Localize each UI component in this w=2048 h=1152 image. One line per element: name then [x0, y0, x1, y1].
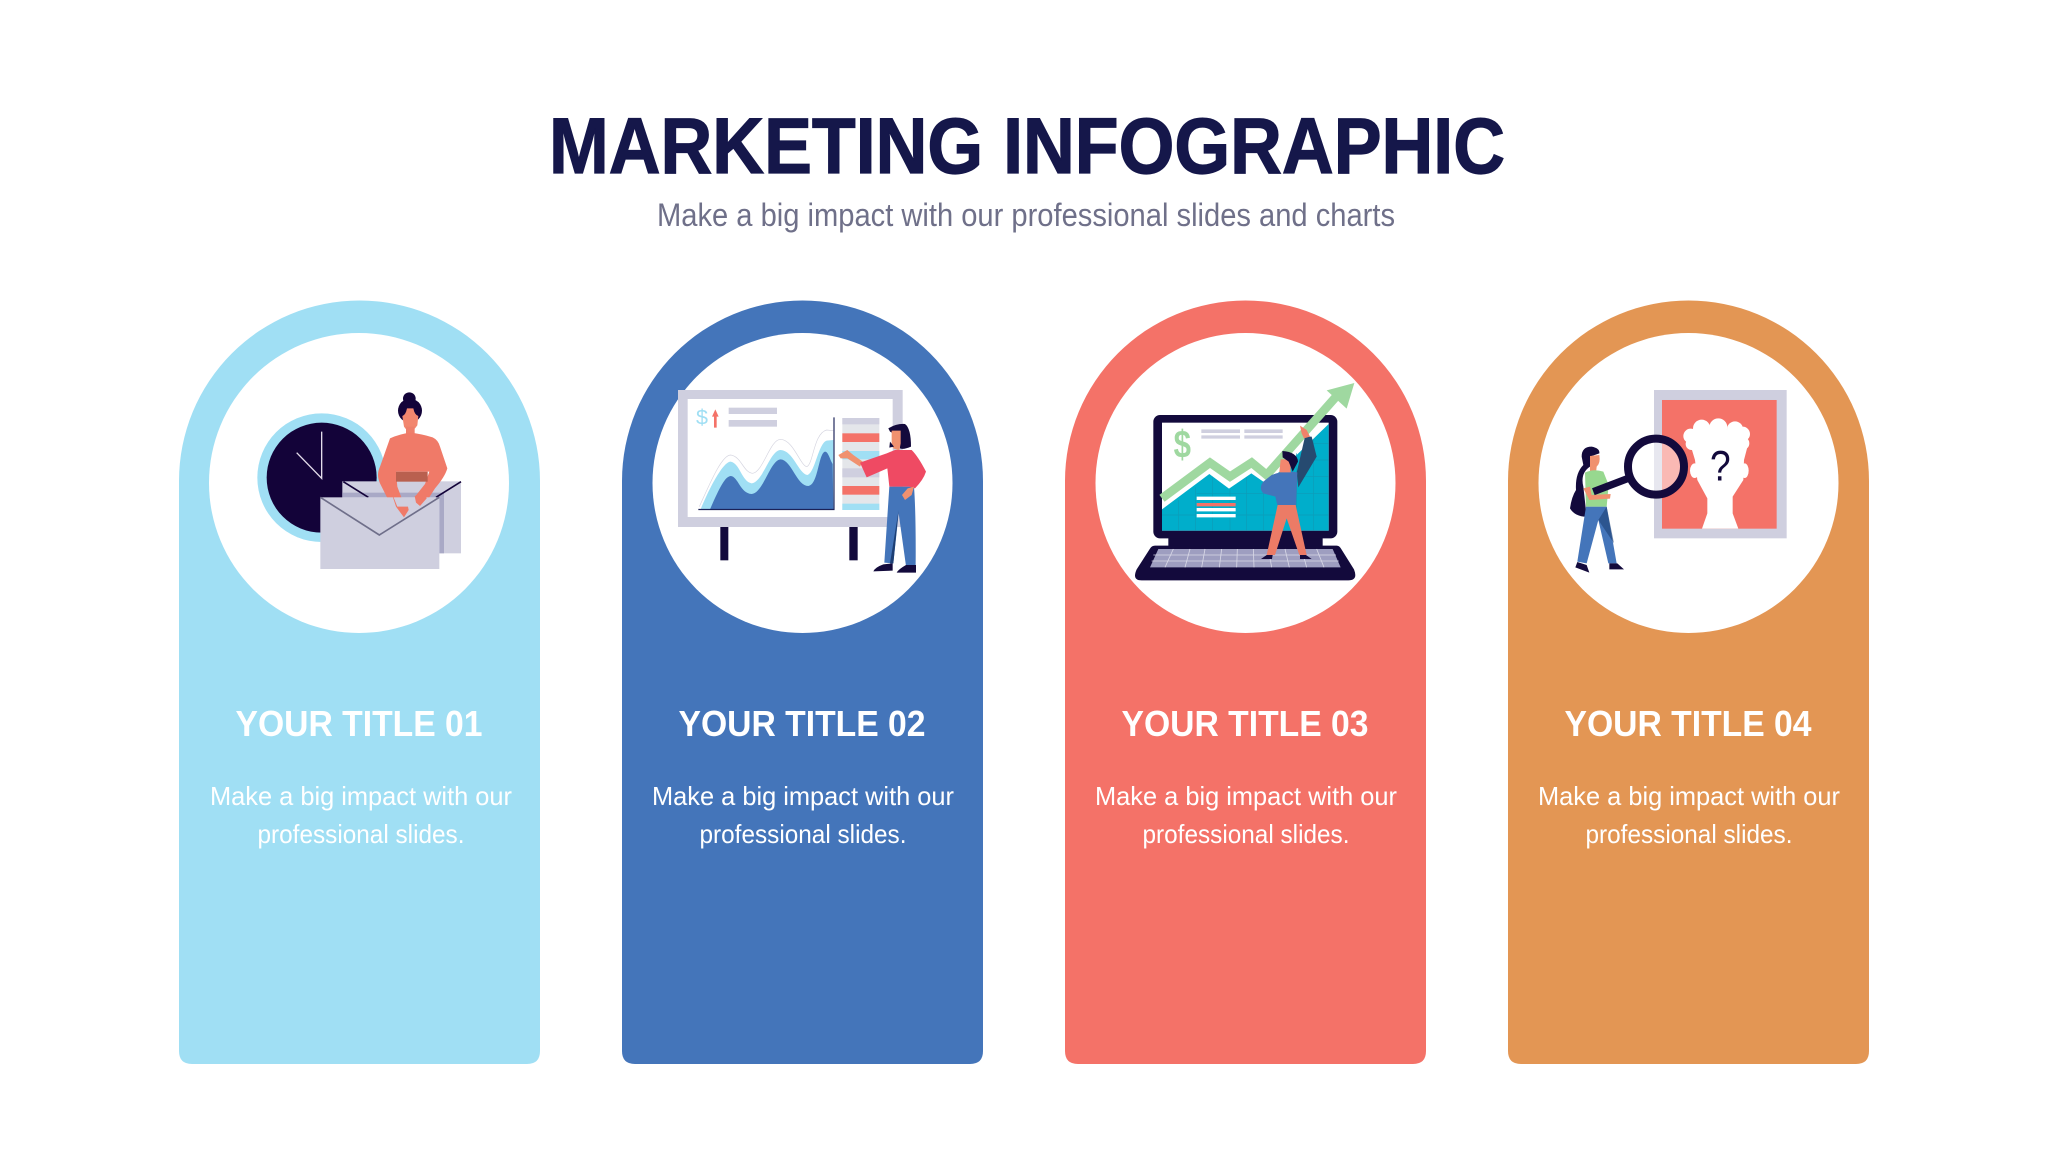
panel: card 03 [1065, 300, 1426, 1064]
white circle [1538, 333, 1838, 633]
icon: laptop with growth arrow: $ [1174, 422, 1191, 466]
card text: Make a big impact with our [652, 781, 954, 811]
card title: YOUR TITLE 03 [1122, 703, 1368, 744]
white circle [652, 333, 952, 633]
card text: Make a big impact with our [210, 781, 512, 811]
icon: presentation board: $ [696, 406, 708, 430]
panel: card 02 [622, 300, 983, 1064]
card shape [1508, 300, 1869, 1064]
card shape [622, 300, 983, 1064]
card text: professional slides. [1586, 819, 1792, 849]
card text: Make a big impact with our [1095, 781, 1397, 811]
white circle [209, 333, 509, 633]
card title: YOUR TITLE 01 [236, 703, 482, 744]
icon: presentation board [678, 390, 926, 573]
title: MARKETING INFOGRAPHIC [549, 101, 1505, 190]
icon: clock and envelopes [257, 392, 461, 569]
card title: YOUR TITLE 02 [678, 703, 926, 744]
card shape [1065, 300, 1426, 1064]
panel: card 04 [1508, 300, 1869, 1064]
icon: magnifier and portrait: ? [1710, 443, 1731, 491]
icon: laptop with growth arrow [1135, 383, 1355, 580]
subtitle: Make a big impact with our professional slides and charts [657, 197, 1395, 233]
panel: card 01 [179, 300, 540, 1064]
card text: professional slides. [700, 819, 906, 849]
card title: YOUR TITLE 04 [1564, 703, 1812, 744]
white circle [1096, 333, 1396, 633]
card text: professional slides. [1142, 819, 1350, 849]
card text: Make a big impact with our [1538, 781, 1840, 811]
card shape [179, 300, 540, 1064]
card text: professional slides. [258, 819, 464, 849]
icon: magnifier and portrait [1570, 390, 1787, 573]
